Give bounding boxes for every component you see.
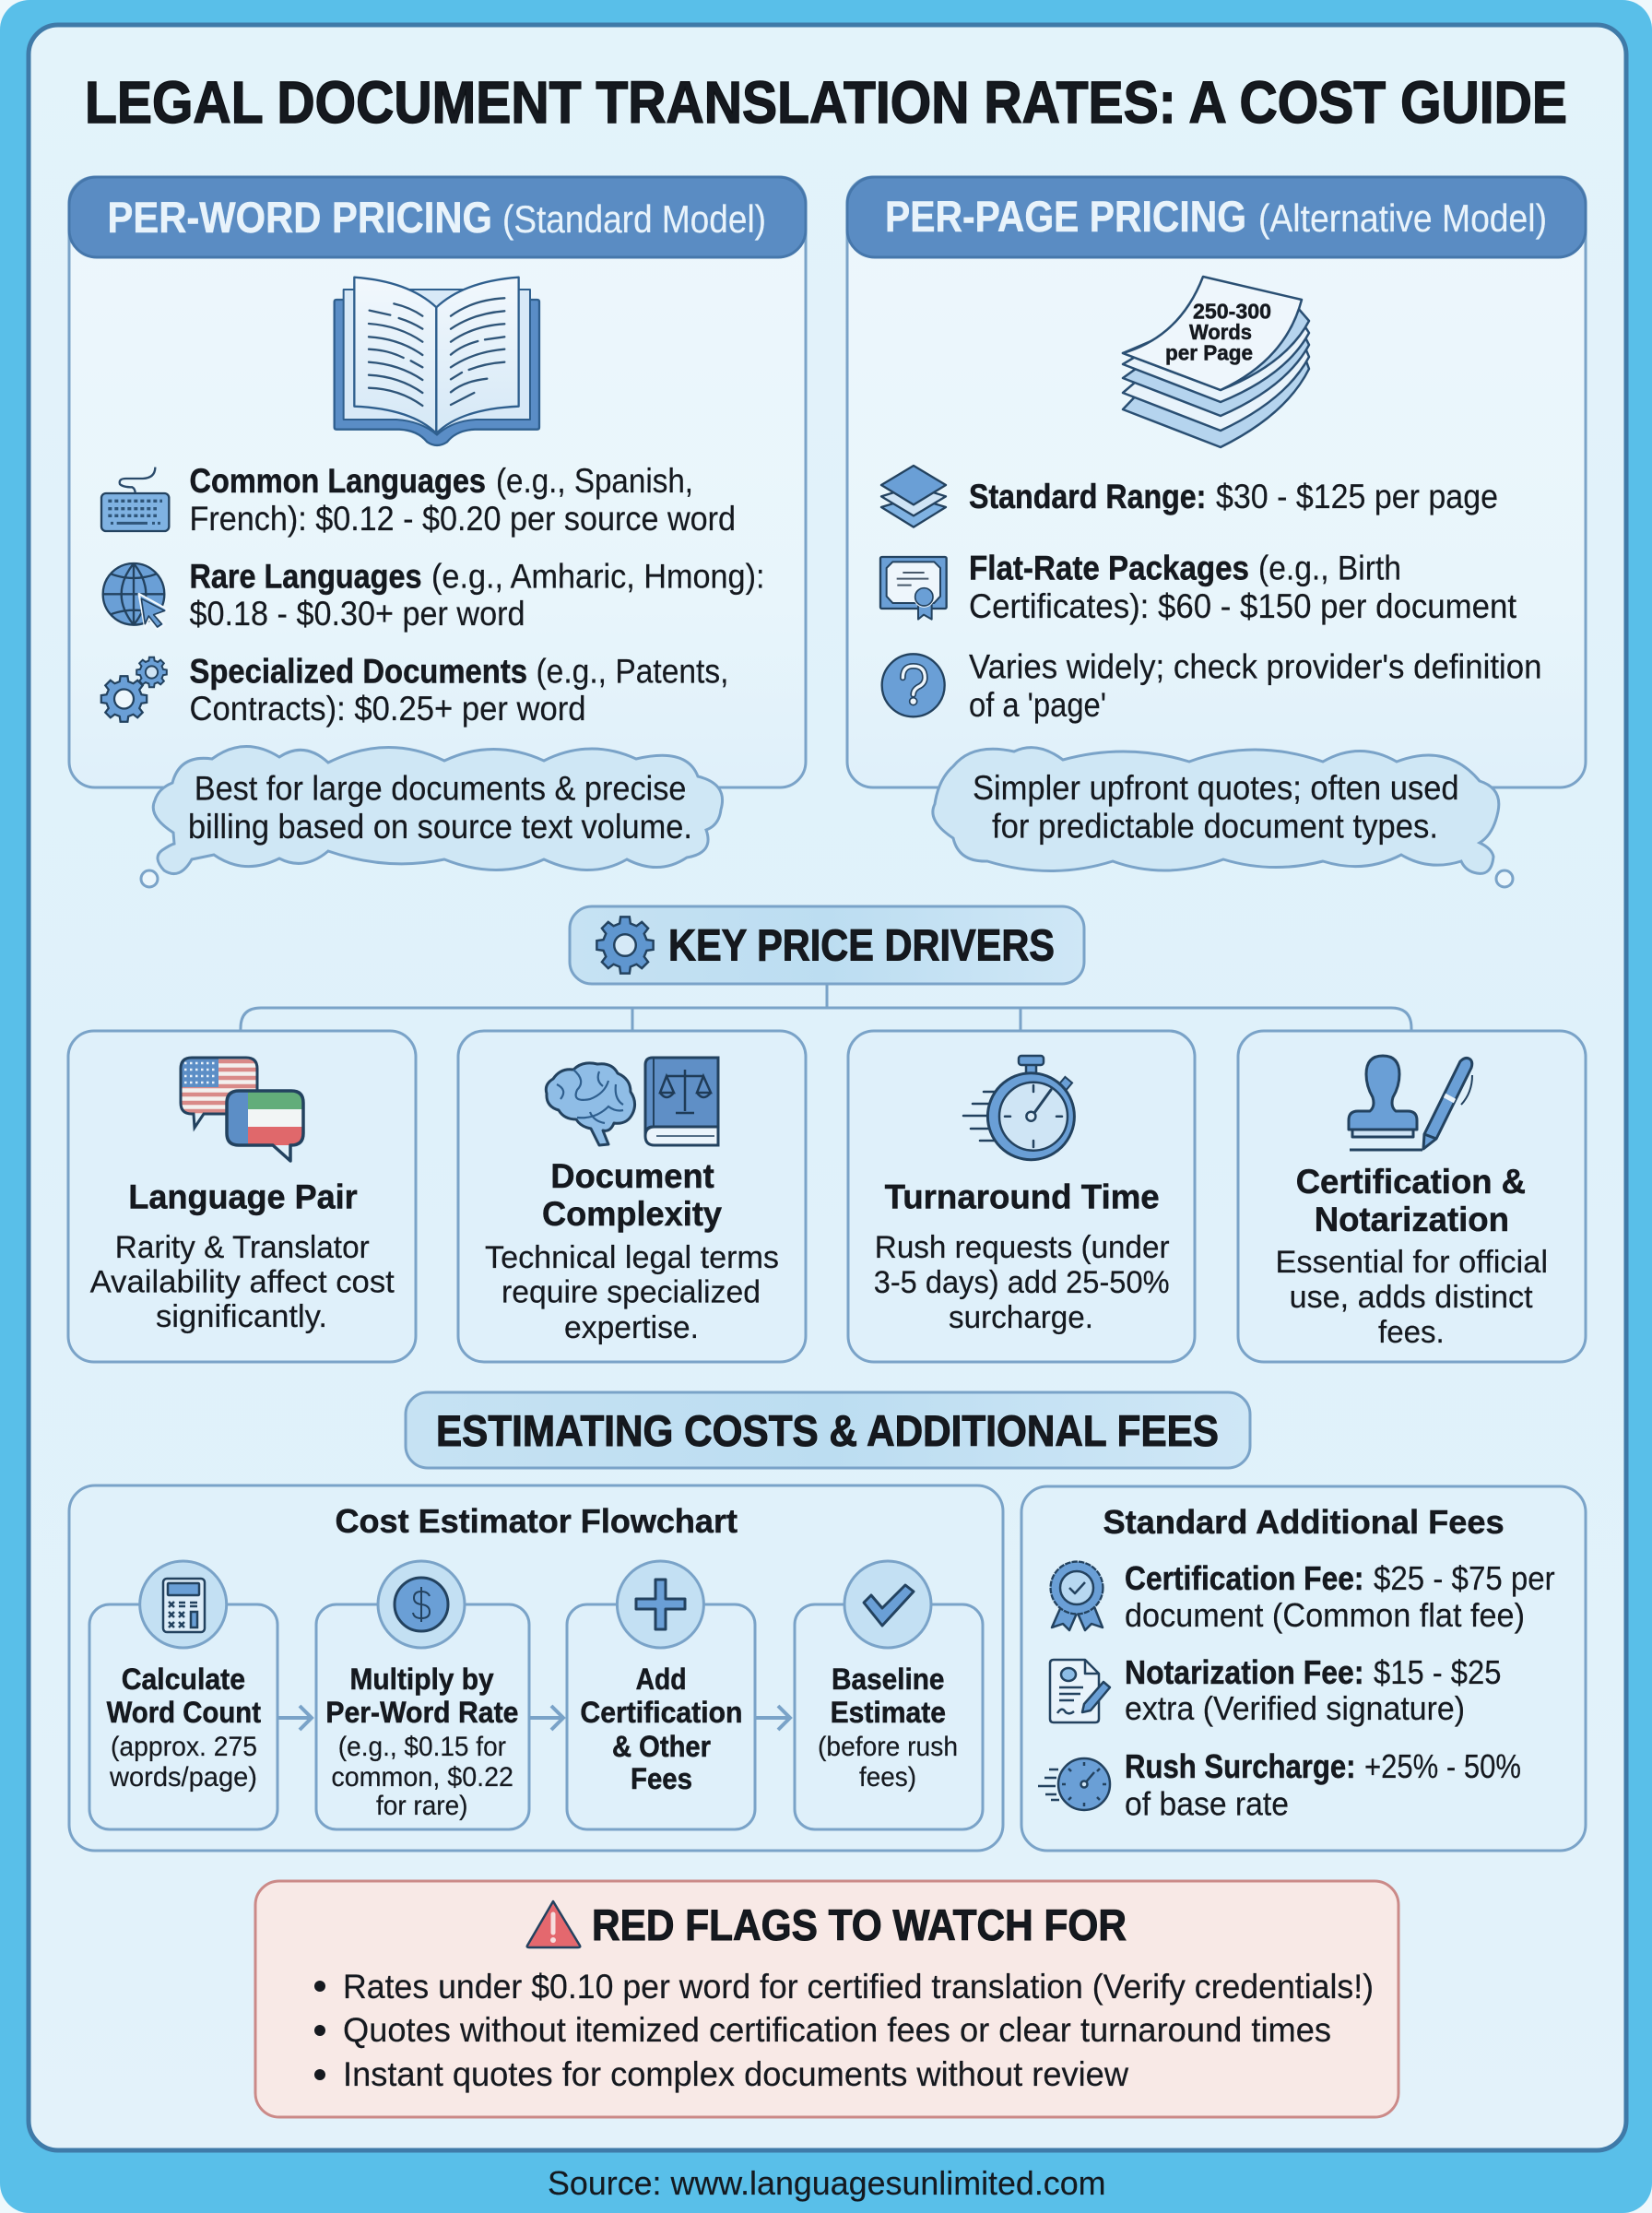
step: calculate word count: Word Count — [107, 1696, 261, 1729]
card: certification and notarization: fees. — [1378, 1315, 1445, 1350]
panel: red flags — [255, 1881, 1398, 2117]
panel: per-page pricing — [847, 177, 1586, 787]
item: varies widely — [882, 648, 1541, 724]
item: notarization fee: $15 - $25 — [1374, 1653, 1501, 1691]
step: calculate word count: (approx. 275 — [111, 1732, 257, 1762]
card: certification and notarization: Essential for official — [1276, 1245, 1548, 1280]
item: certification fee — [1051, 1559, 1555, 1634]
fees title: Standard Additional Fees — [1103, 1503, 1504, 1541]
red flags list: Quotes without itemized certification fees or clear turnaround times — [343, 2011, 1331, 2049]
red flags list: Instant quotes for complex documents without review — [343, 2055, 1128, 2093]
step: multiply by per-word rate: (e.g., $0.15 for — [338, 1732, 506, 1762]
card: certification and notarization: Notarization — [1315, 1201, 1509, 1238]
card: language pair: Language Pair — [128, 1178, 358, 1216]
callout: per-word cloud: Best for large documents & precise — [195, 769, 686, 808]
icon: award badge — [1051, 1562, 1103, 1630]
icon: globe with cursor — [103, 563, 169, 630]
item: notarization fee — [1050, 1653, 1501, 1727]
panel: per-word pricing — [69, 177, 806, 787]
item: standard range: $30 - $125 per page — [1216, 478, 1498, 515]
item: rush surcharge: of base rate — [1125, 1785, 1289, 1823]
heading: estimating costs: ESTIMATING COSTS & ADDITIONAL FEES — [436, 1406, 1219, 1455]
step: baseline estimate: Estimate — [831, 1696, 946, 1729]
item: rare languages: Rare Languages — [190, 557, 422, 596]
arrow — [530, 1706, 563, 1730]
item: common languages: Common Languages — [190, 462, 486, 500]
icon: signed document — [1050, 1660, 1110, 1722]
step: add certification and other fees: Add — [636, 1663, 687, 1696]
callout: per-page cloud: for predictable document types. — [992, 808, 1438, 846]
icon: stamp and pen — [1349, 1056, 1472, 1150]
panel header: per-word — [69, 177, 806, 257]
card: turnaround time: 3-5 days) add 25-50% — [874, 1265, 1170, 1300]
item: standard range — [881, 466, 1498, 527]
red flags list — [314, 1968, 1374, 2093]
callout: per-word cloud: billing based on source text volume. — [188, 808, 692, 846]
icon: paper stack — [1123, 277, 1309, 447]
card: turnaround time: Turnaround Time — [885, 1178, 1160, 1216]
card: language pair: Rarity & Translator — [115, 1230, 370, 1265]
step: baseline estimate — [795, 1561, 983, 1829]
card: language pair: significantly. — [156, 1299, 327, 1334]
card: language pair: Availability affect cost — [90, 1265, 395, 1300]
item: standard range: Standard Range: — [969, 478, 1206, 515]
icon: stopwatch — [963, 1056, 1074, 1160]
card: document complexity: Technical legal terms — [485, 1240, 779, 1275]
item: common languages — [101, 462, 736, 538]
item: certification fee: Certification Fee: — [1125, 1559, 1364, 1597]
card: certification and notarization — [1238, 1031, 1586, 1362]
step: add certification and other fees: Fees — [631, 1762, 692, 1795]
item: common languages: (e.g., Spanish, — [496, 462, 693, 500]
connector: price driver tree — [241, 984, 1411, 1031]
heading: estimating costs — [406, 1392, 1250, 1468]
panel header: per-word: PER-WORD PRICING — [107, 193, 492, 242]
item: certification fee: $25 - $75 per — [1374, 1559, 1555, 1597]
red flags heading: RED FLAGS TO WATCH FOR — [592, 1900, 1127, 1949]
icon: gear — [596, 917, 654, 974]
step: baseline estimate: (before rush — [818, 1732, 958, 1762]
item: rush surcharge: Rush Surcharge: — [1125, 1747, 1355, 1785]
item: rare languages: $0.18 - $0.30+ per word — [190, 595, 525, 633]
item: common languages: French): $0.12 - $0.20 per source word — [190, 500, 736, 538]
paper stack label: Words — [1189, 320, 1252, 344]
card: turnaround time: Rush requests (under — [875, 1230, 1170, 1265]
icon: open book — [335, 278, 539, 445]
icon: gears — [101, 657, 167, 722]
icon: certificate — [880, 557, 947, 620]
item: flat-rate packages: Certificates): $60 - $150 per document — [969, 587, 1517, 625]
paper stack label: per Page — [1165, 341, 1253, 365]
item: rare languages: (e.g., Amharic, Hmong): — [431, 557, 765, 596]
item: specialized documents: Specialized Documents — [190, 653, 527, 691]
heading: key price drivers: KEY PRICE DRIVERS — [668, 922, 1055, 971]
callout: per-page cloud — [933, 748, 1513, 887]
item: flat-rate packages: Flat-Rate Packages — [969, 550, 1249, 587]
item: notarization fee: extra (Verified signature) — [1125, 1689, 1465, 1727]
card: certification and notarization: Certification & — [1296, 1163, 1526, 1201]
item: rush surcharge: +25% - 50% — [1364, 1747, 1521, 1785]
card: certification and notarization: use, adds distinct — [1290, 1280, 1533, 1315]
step: calculate word count: Calculate — [122, 1663, 245, 1696]
card: document complexity: expertise. — [564, 1310, 699, 1345]
icon: keyboard — [101, 467, 169, 531]
paper stack label — [1165, 300, 1271, 365]
card: document complexity: require specialized — [502, 1275, 761, 1310]
icon: brain and law book — [546, 1058, 718, 1145]
icon: warning triangle — [527, 1901, 580, 1947]
item: varies widely: Varies widely; check provider's definition — [969, 648, 1541, 686]
heading: key price drivers — [570, 906, 1084, 984]
item: specialized documents: Contracts): $0.25+ per word — [190, 690, 586, 728]
item: varies widely: of a 'page' — [969, 686, 1106, 724]
card: turnaround time: surcharge. — [949, 1300, 1093, 1335]
panel header: per-page: (Alternative Model) — [1258, 196, 1547, 240]
item: specialized documents: (e.g., Patents, — [537, 653, 728, 691]
item: rare languages — [103, 557, 764, 633]
icon: dollar coin — [395, 1578, 448, 1631]
item: rush surcharge — [1038, 1747, 1521, 1823]
item: certification fee: document (Common flat fee) — [1125, 1596, 1525, 1634]
card: turnaround time — [848, 1031, 1195, 1362]
card: document complexity: Complexity — [542, 1195, 722, 1233]
step: multiply by per-word rate: Per-Word Rate — [325, 1696, 518, 1729]
item: flat-rate packages: (e.g., Birth — [1258, 550, 1401, 587]
item: flat-rate packages — [880, 550, 1517, 625]
icon: plus — [636, 1580, 685, 1629]
panel header: per-page — [847, 177, 1586, 257]
panel header: per-page: PER-PAGE PRICING — [885, 192, 1246, 241]
step: calculate word count: words/page) — [109, 1762, 257, 1793]
callout: per-word cloud — [141, 746, 723, 887]
callout: per-page cloud: Simpler upfront quotes; often used — [973, 769, 1459, 807]
step: multiply by per-word rate: Multiply by — [350, 1663, 494, 1696]
item: notarization fee: Notarization Fee: — [1125, 1653, 1364, 1691]
card: document complexity: Document — [550, 1157, 714, 1195]
card: language pair — [68, 1031, 416, 1362]
step: add certification and other fees: Certification — [580, 1696, 743, 1729]
panel header: per-word: (Standard Model) — [502, 197, 766, 241]
step: baseline estimate: Baseline — [832, 1663, 944, 1696]
icon: layers — [881, 466, 946, 527]
icon: speed gauge — [1038, 1758, 1110, 1810]
icon: check mark — [864, 1585, 914, 1626]
panel: cost estimator flowchart — [69, 1485, 1003, 1851]
red flags list: Rates under $0.10 per word for certified translation (Verify credentials!) — [343, 1968, 1374, 2006]
icon: question mark — [882, 654, 945, 716]
panel: standard additional fees — [1021, 1486, 1586, 1851]
step: add certification and other fees — [567, 1561, 755, 1829]
paper stack label: 250-300 — [1193, 300, 1271, 324]
source line: Source: www.languagesunlimited.com — [548, 2164, 1106, 2202]
card: document complexity — [458, 1031, 806, 1362]
step: baseline estimate: fees) — [859, 1762, 916, 1793]
icon: calculator — [163, 1579, 205, 1632]
step: multiply by per-word rate: common, $0.22 — [331, 1762, 513, 1793]
icon: flag speech bubbles — [181, 1058, 303, 1161]
item: specialized documents — [101, 653, 729, 728]
flowchart title: Cost Estimator Flowchart — [336, 1502, 738, 1540]
step: multiply by per-word rate — [316, 1561, 529, 1829]
arrow — [756, 1706, 790, 1730]
step: multiply by per-word rate: for rare) — [376, 1791, 468, 1821]
step: add certification and other fees: & Other — [612, 1730, 711, 1763]
step: calculate word count — [89, 1561, 277, 1829]
arrow — [278, 1706, 312, 1730]
